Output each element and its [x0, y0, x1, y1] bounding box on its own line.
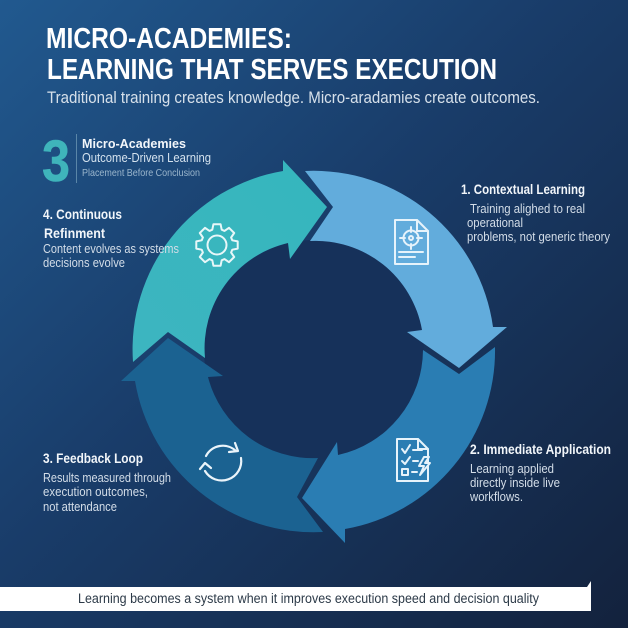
icon: refresh cycle: [200, 443, 241, 480]
footer banner: Learning becomes a system when it improves execution speed and decision quality: [78, 591, 539, 606]
arrow: step 1 light blue: [305, 171, 507, 368]
step 2 text: [469, 441, 611, 504]
title: LEARNING THAT SERVES EXECUTION: [47, 54, 497, 86]
icon: checklist document: [397, 439, 430, 481]
step 4 text: 4. Continuous: [43, 206, 122, 222]
big number 3: 3: [42, 129, 70, 194]
step 3 text: Results measured through: [43, 471, 171, 485]
cycle diagram: [121, 160, 507, 543]
step 3 text: [43, 450, 171, 514]
badge text: Outcome-Driven Learning: [82, 151, 211, 165]
step 1 text: [461, 181, 611, 244]
badge text: Micro-Academies: [82, 136, 186, 151]
step 4 text: [43, 206, 179, 270]
badge: 3 micro-academies: [42, 129, 211, 194]
step 4 text: decisions evolve: [43, 256, 125, 270]
inner circle: [204, 240, 424, 460]
step 3 text: not attendance: [43, 500, 117, 514]
arrow: step 4 teal: [133, 160, 327, 362]
icon: gear: [196, 224, 238, 266]
arrow: step 3 dark blue: [121, 338, 323, 532]
step 1 text: Training alighed to real: [470, 202, 585, 216]
icon: target document: [395, 220, 428, 264]
title: MICRO-ACADEMIES:: [46, 23, 292, 55]
badge text: [82, 136, 211, 179]
step 4 text: Refinment: [44, 225, 105, 241]
step 2 text: Learning applied: [470, 462, 554, 476]
step 1 text: problems, not generic theory: [467, 230, 611, 244]
footer banner: [0, 581, 591, 611]
step 2 text: directly inside live: [470, 476, 560, 490]
step 4 text: Content evolves as systems: [43, 242, 179, 256]
step 3 text: 3. Feedback Loop: [43, 450, 143, 466]
title: [46, 23, 497, 86]
badge text: Placement Before Conclusion: [82, 167, 200, 179]
subtitle: Traditional training creates knowledge. Micro-aradamies create outcomes.: [47, 89, 540, 107]
step 1 text: 1. Contextual Learning: [461, 181, 585, 197]
step 3 text: execution outcomes,: [43, 485, 148, 499]
step 1 text: operational: [467, 216, 523, 230]
step 2 text: workflows.: [469, 490, 523, 504]
arrow: step 2 mid blue: [302, 347, 495, 543]
